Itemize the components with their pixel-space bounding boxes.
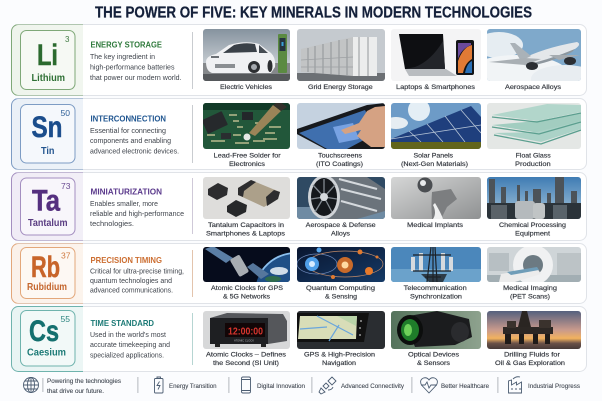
captions: tantalum applications: Smartphones & Laptops xyxy=(206,230,286,238)
element tile: Li: 3 xyxy=(65,35,70,44)
description: time standard: specialized applications. xyxy=(90,352,164,360)
icon: heart with pulse xyxy=(421,378,437,393)
element tile: Rb xyxy=(20,248,75,298)
element tile: Cs: Caesium xyxy=(27,348,66,358)
photo: touchscreen tablet xyxy=(291,103,385,149)
label: digital innovation: Digital Innovation xyxy=(257,383,305,390)
captions: rubidium applications: (PET Scans) xyxy=(510,294,550,300)
captions: tantalum applications: Alloys xyxy=(331,230,351,238)
captions: lithium applications xyxy=(220,84,562,91)
description: time standard: accurate timekeeping and xyxy=(90,342,170,349)
photo: atomic clock device xyxy=(203,311,290,349)
description: time standard xyxy=(90,332,170,360)
captions: rubidium applications xyxy=(211,285,557,300)
captions: lithium applications: Grid Energy Storage xyxy=(308,84,373,91)
photo: telecommunication tower xyxy=(391,247,481,282)
icon: globe xyxy=(24,378,38,392)
panel: rubidium precision timing xyxy=(11,243,587,304)
element tile: Ta: Ta xyxy=(32,184,60,218)
photo: lead-free solder on circuit board xyxy=(202,101,290,149)
element tile: Ta xyxy=(20,178,75,235)
captions: rubidium applications: & Sensing xyxy=(325,294,357,300)
description: energy storage: high-performance batteries xyxy=(90,64,175,72)
element tile: Rb: Rubidium xyxy=(27,282,67,293)
footer tagline xyxy=(47,378,122,395)
captions: rubidium applications: Medical Imaging xyxy=(503,285,557,292)
element tile: Sn: 50 xyxy=(60,109,71,118)
description: interconnection xyxy=(90,128,179,156)
footer tagline: Powering the technologies xyxy=(47,378,122,385)
captions: tin applications: Production xyxy=(515,161,551,168)
description: miniaturization xyxy=(90,201,184,228)
description: energy storage: that power our modern world. xyxy=(90,75,182,82)
photo: PET scanner xyxy=(487,247,581,282)
photo: atomic clock device: 12:00:00 xyxy=(228,326,263,338)
element tile: Sn xyxy=(20,104,75,163)
element tile: Cs xyxy=(20,310,75,366)
captions: tantalum applications: Aerospace & Defense xyxy=(306,222,376,229)
element tile: Li: Li xyxy=(37,39,58,72)
photo: chemical processing plant xyxy=(487,177,581,219)
captions: caesium applications: Atomic Clocks – Defines xyxy=(206,352,287,358)
panel: lithium energy storage xyxy=(12,24,599,96)
captions: caesium applications: GPS & High-Precision xyxy=(304,352,375,358)
captions: rubidium applications: Synchronization xyxy=(410,294,462,300)
photo: aerospace aircraft xyxy=(487,29,581,81)
photo: aerospace jet engine xyxy=(297,175,385,219)
photo: medical implant xyxy=(391,177,481,219)
footer tagline: that drive our future. xyxy=(47,388,104,395)
captions: tantalum applications: Medical Implants xyxy=(407,222,464,229)
description: energy storage xyxy=(90,54,182,82)
label: industrial progress: Industrial Progress xyxy=(528,383,581,390)
description: precision timing: Critical for ultra-precise timing, xyxy=(90,268,184,276)
element tile: Rb: 37 xyxy=(61,252,71,260)
icon: battery xyxy=(154,377,163,393)
photo: quantum computing network xyxy=(297,247,385,282)
heading: miniaturization: MINIATURIZATION xyxy=(90,186,162,196)
label: advanced connectivity: Advanced Connectivity xyxy=(341,383,405,390)
captions: tantalum applications: Chemical Processing xyxy=(499,222,566,229)
heading: time standard: TIME STANDARD xyxy=(90,318,154,328)
captions: tin applications: Lead-Free Solder for xyxy=(214,152,281,160)
photo: GPS satellite over earth xyxy=(203,247,290,282)
captions: lithium applications: Laptops & Smartphones xyxy=(396,84,476,91)
panel: tantalum miniaturization xyxy=(12,172,586,240)
footer strip xyxy=(24,377,581,395)
panel: tin interconnection xyxy=(12,98,586,170)
captions: rubidium applications: & 5G Networks xyxy=(223,294,271,300)
captions: rubidium applications: Quantum Computing xyxy=(306,285,375,292)
photo: solar panels xyxy=(391,103,481,149)
photo: offshore drilling rig xyxy=(487,311,581,349)
icon: phone xyxy=(242,377,250,393)
captions: tin applications: Solar Panels xyxy=(414,152,454,160)
title: THE POWER OF FIVE: KEY MINERALS IN MODERN TECHNOLOGIES xyxy=(95,4,532,22)
photo: laptop and smartphone xyxy=(391,29,481,81)
captions: caesium applications: Optical Devices xyxy=(408,352,460,358)
description: interconnection: components and enabling xyxy=(90,138,171,145)
description: precision timing: quantum technologies and xyxy=(90,278,172,285)
description: precision timing xyxy=(90,268,184,294)
element tile: Cs: 55 xyxy=(60,315,71,324)
element tile: Li xyxy=(20,30,75,90)
photo: float glass sheets xyxy=(487,103,581,149)
photo: optical device lens xyxy=(391,311,481,349)
label: energy transition: Energy Transition xyxy=(169,383,217,390)
photo: atomic clock device: ATOMIC CLOCK xyxy=(234,338,254,342)
icon: factory xyxy=(508,377,522,393)
photo: grid energy storage xyxy=(297,29,385,81)
photo: GPS navigation device xyxy=(297,311,385,349)
element tile: Sn: Tin xyxy=(41,146,54,157)
panel: caesium time standard xyxy=(12,306,586,372)
description: miniaturization: Enables smaller, more xyxy=(90,201,158,208)
captions: tin applications: (ITO Coatings) xyxy=(316,161,363,168)
element tile: Ta: 73 xyxy=(61,182,71,191)
element tile: Sn: Sn xyxy=(32,111,62,144)
captions: tin applications xyxy=(214,152,551,168)
captions: rubidium applications: Telecommunication xyxy=(404,285,467,292)
captions: caesium applications: the Second (SI Unit) xyxy=(213,360,279,367)
description: energy storage: The key ingredient in xyxy=(90,54,155,61)
captions: tantalum applications xyxy=(206,222,566,238)
heading: precision timing: PRECISION TIMING xyxy=(90,255,162,265)
description: miniaturization: technologies. xyxy=(90,221,134,228)
captions: lithium applications: Electric Vehicles xyxy=(220,84,273,91)
captions: lithium applications: Aerospace Alloys xyxy=(505,84,562,91)
description: miniaturization: reliable and high-performance xyxy=(90,211,184,218)
captions: tantalum applications: Equipment xyxy=(515,230,550,238)
captions: tin applications: Float Glass xyxy=(516,152,551,160)
captions: caesium applications: Drilling Fluids for xyxy=(504,352,561,358)
element tile: Ta: Tantalum xyxy=(28,218,68,229)
description: time standard: Used in the world's most xyxy=(90,332,166,339)
captions: caesium applications xyxy=(206,352,565,367)
label: better healthcare: Better Healthcare xyxy=(441,383,489,390)
captions: caesium applications: Navigation xyxy=(322,360,356,367)
description: interconnection: advanced electronic devices. xyxy=(90,148,179,156)
element tile: Rb: Rb xyxy=(31,251,60,284)
photo: tantalum capacitors xyxy=(203,177,290,219)
captions: caesium applications: Oil & Gas Exploration xyxy=(495,360,565,367)
captions: tin applications: Electronics xyxy=(229,161,266,168)
captions: tantalum applications: Tantalum Capacitors in xyxy=(208,222,284,229)
description: interconnection: Essential for connecting xyxy=(90,128,166,135)
heading: energy storage: ENERGY STORAGE xyxy=(90,40,162,50)
description: precision timing: advanced communications. xyxy=(90,288,173,294)
photo: electric vehicle xyxy=(203,29,290,81)
element tile: Li: Lithium xyxy=(32,73,65,84)
captions: rubidium applications: Atomic Clocks for GPS xyxy=(211,285,283,292)
element tile: Cs: Cs xyxy=(29,315,59,348)
icon: satellite xyxy=(319,377,336,394)
captions: tin applications: Touchscreens xyxy=(318,152,363,160)
captions: tin applications: (Next-Gen Materials) xyxy=(401,161,468,168)
captions: caesium applications: & Sensors xyxy=(417,360,451,367)
heading: interconnection: INTERCONNECTION xyxy=(90,114,166,124)
